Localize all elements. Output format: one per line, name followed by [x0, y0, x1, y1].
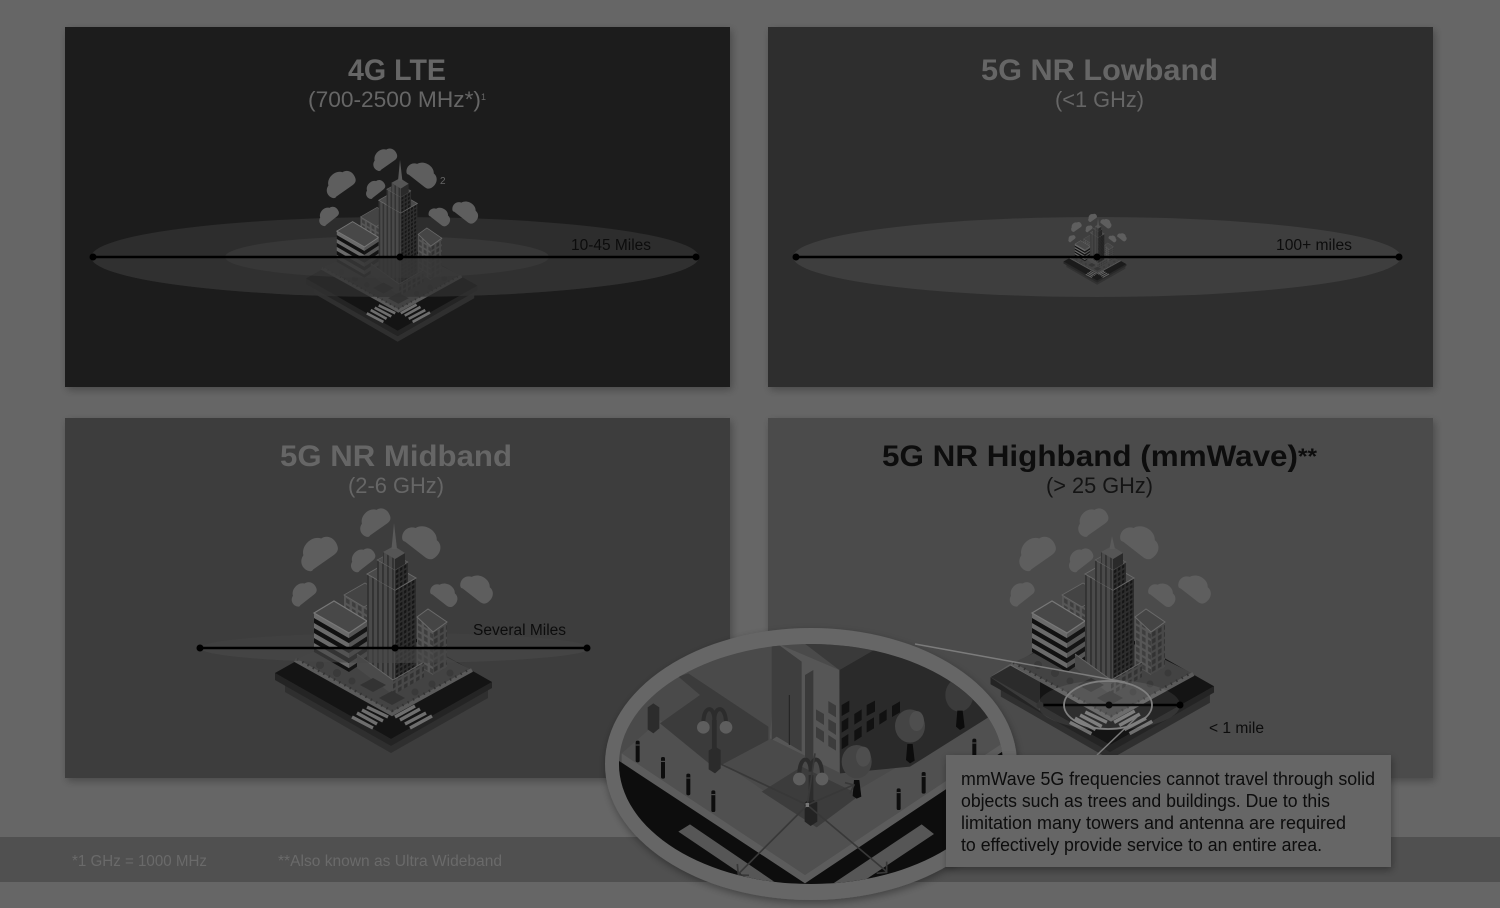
subheading: Lowband frequency: (<1 GHz): [1055, 87, 1144, 112]
callout text: objects such as trees and buildings. Due to this: [961, 790, 1330, 811]
connector lines to magnifier: [915, 644, 1137, 755]
panel: 5G NR Midband: [65, 418, 730, 778]
coverage area: [200, 633, 590, 663]
small box: [648, 703, 659, 733]
trees: [842, 678, 973, 799]
panel: 5G NR Highband: [768, 418, 1433, 778]
range line: [196, 644, 590, 652]
range label: Several Miles: [473, 622, 566, 639]
range line: [1036, 702, 1184, 708]
bollards: [636, 739, 976, 812]
building: [840, 650, 988, 774]
coverage overlay below line: [306, 258, 478, 297]
footnote mark 2: 2: [440, 176, 446, 187]
subheading: 4G frequency: (700-2500 MHz*): [308, 87, 481, 112]
signal arrows: [721, 753, 887, 875]
subheading: Highband frequency: (> 25 GHz): [1046, 473, 1153, 498]
callout text: limitation many towers and antenna are required: [961, 812, 1346, 833]
footnote mark 1: 1: [481, 92, 486, 102]
plaza patch: [660, 673, 768, 768]
heading: Midband: 5G NR Midband: [280, 440, 512, 473]
city illustration: [1063, 212, 1128, 285]
heading: 4G LTE: 4G LTE: [348, 54, 446, 87]
lens ring: [605, 628, 1017, 900]
city illustration: [991, 502, 1217, 759]
panel: 5G NR Lowband: [768, 27, 1433, 387]
coverage area: [1038, 680, 1180, 730]
range line: [792, 254, 1402, 260]
roads: [619, 752, 1002, 884]
city illustration: [275, 502, 499, 753]
callout text: mmWave 5G frequencies cannot travel through solid: [961, 768, 1375, 789]
coverage overlay below line: [793, 217, 1401, 297]
footnote: ultra wideband: **Also known as Ultra Wideband: [278, 853, 502, 870]
range line: [90, 254, 700, 260]
lens street scene: [619, 644, 1002, 884]
coverage area outer: [91, 217, 699, 297]
heading: Highband: 5G NR Highband (mmWave): [882, 440, 1298, 473]
zoom target ellipse: [1064, 681, 1152, 729]
building windows: [816, 701, 836, 751]
heading footnote marks: **: [1298, 444, 1317, 469]
coverage area inner: [225, 236, 549, 278]
sidewalk: [622, 707, 1033, 875]
callout text: to effectively provide service to an entire area.: [961, 834, 1322, 855]
plaza under lamp: [762, 767, 860, 827]
city illustration: [306, 143, 483, 342]
coverage area: [793, 217, 1401, 297]
range label: 10-45 Miles: [571, 237, 651, 254]
range label: 100+ miles: [1276, 237, 1352, 254]
callout: [946, 755, 1391, 867]
lit road arm: [990, 664, 1040, 711]
coverage overlay below line: [295, 649, 458, 663]
footnote: GHz: *1 GHz = 1000 MHz: [72, 853, 207, 870]
street lamp center: [793, 760, 828, 826]
heading: Lowband: 5G NR Lowband: [981, 54, 1218, 87]
footer band: [0, 837, 1500, 882]
magnifier lens: [600, 620, 1033, 908]
range label: < 1 mile: [1209, 720, 1264, 737]
subheading: Midband frequency: (2-6 GHz): [348, 473, 444, 498]
street lamp left: [697, 709, 732, 773]
panel: 4G LTE: [65, 27, 730, 387]
